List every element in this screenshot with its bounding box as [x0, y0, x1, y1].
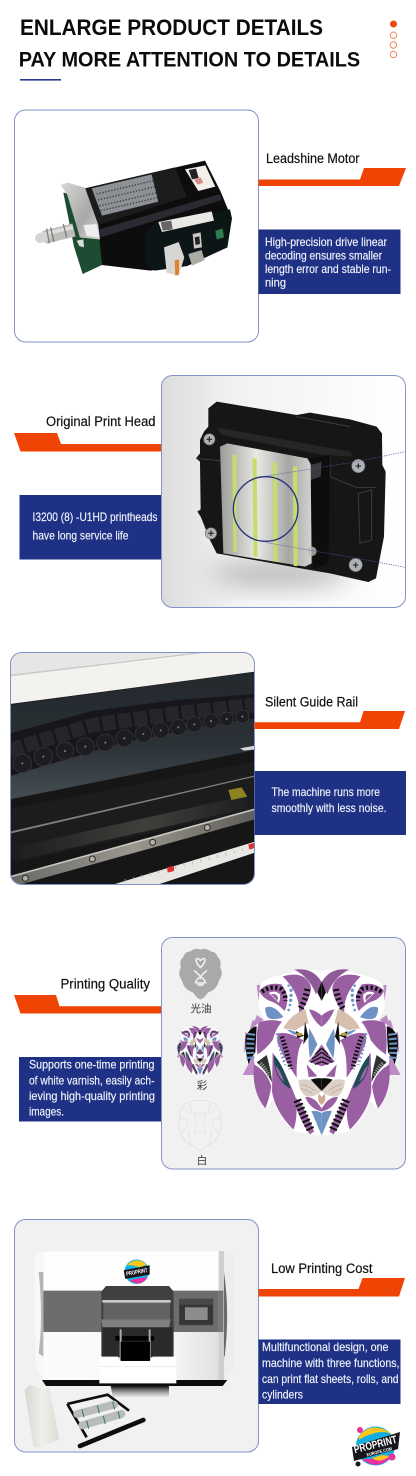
- icon: white ink lion: [178, 1100, 222, 1151]
- heading: Printing Quality: [60, 977, 150, 992]
- orange bar: [258, 168, 406, 186]
- icon: colour lion: [177, 1026, 223, 1075]
- text block: smoothly with less noise.: [272, 801, 386, 815]
- text block: cylinders: [262, 1388, 303, 1402]
- text block: ieving high-quality printing: [29, 1089, 155, 1103]
- heading: Original Print Head: [46, 414, 156, 429]
- icon: motor: [40, 161, 232, 276]
- title: [19, 15, 360, 72]
- title: ENLARGE PRODUCT DETAILS: [20, 15, 323, 40]
- mini logo: [124, 1259, 150, 1284]
- mini logo: PROPRINT: [126, 1268, 148, 1278]
- print head photo card: [162, 376, 407, 608]
- icon: large lion: [243, 969, 401, 1136]
- text block: High-precision drive linear: [265, 235, 387, 249]
- icon: gloss varnish lion: [179, 949, 222, 1000]
- title: PAY MORE ATTENTION TO DETAILS: [19, 49, 360, 72]
- printer photo card: [14, 1220, 258, 1452]
- logo: Proprint Europe: [352, 1426, 400, 1466]
- caption: 白: [197, 1154, 207, 1167]
- rail photo card: [10, 650, 255, 887]
- panel: Leadshine Motor: [14, 110, 406, 342]
- text block: [258, 230, 400, 294]
- panel: Original Print Head: [14, 376, 407, 608]
- heading: Leadshine Motor: [266, 151, 360, 166]
- icon: print head: [196, 402, 407, 582]
- caption: 彩: [197, 1080, 208, 1092]
- logo: Proprint Europe: PROPRINT: [353, 1434, 399, 1456]
- text block: can print flat sheets, rolls, and: [262, 1372, 398, 1386]
- panel: Silent Guide Rail: [10, 650, 406, 887]
- panel: Printing Quality: [14, 938, 406, 1169]
- text block: images.: [29, 1105, 64, 1119]
- caption: 光油: [190, 1002, 212, 1015]
- icon: printer machine: [25, 1251, 234, 1448]
- text block: [20, 495, 162, 560]
- orange bar: [258, 1278, 405, 1296]
- text block: I3200 (8) -U1HD printheads: [32, 510, 158, 524]
- text block: [258, 1340, 400, 1404]
- orange bar: [254, 711, 405, 729]
- text block: Multifunctional design, one: [262, 1340, 389, 1354]
- text block: decoding ensures smaller: [265, 248, 382, 262]
- heading: Low Printing Cost: [271, 1261, 373, 1276]
- text block: [254, 771, 406, 835]
- text block: ning: [265, 276, 286, 290]
- text block: have long service life: [32, 528, 129, 542]
- panel: Low Printing Cost: [14, 1220, 405, 1452]
- photo: guide rail: [10, 650, 255, 887]
- lion print samples card: [162, 938, 406, 1169]
- text block: The machine runs more: [272, 785, 380, 799]
- orange bar: [14, 433, 162, 452]
- text block: Supports one-time printing: [29, 1058, 154, 1072]
- text block: [19, 1057, 162, 1122]
- text block: machine with three functions,: [262, 1356, 400, 1370]
- orange bar: [14, 995, 162, 1014]
- logo: Proprint Europe: EUROPE.COM: [366, 1446, 393, 1457]
- text block: length error and stable run-: [265, 262, 391, 276]
- heading: Silent Guide Rail: [265, 695, 358, 710]
- text block: of white varnish, easily ach-: [29, 1074, 155, 1088]
- motor photo card: [14, 110, 258, 342]
- pagination dots: [390, 20, 397, 58]
